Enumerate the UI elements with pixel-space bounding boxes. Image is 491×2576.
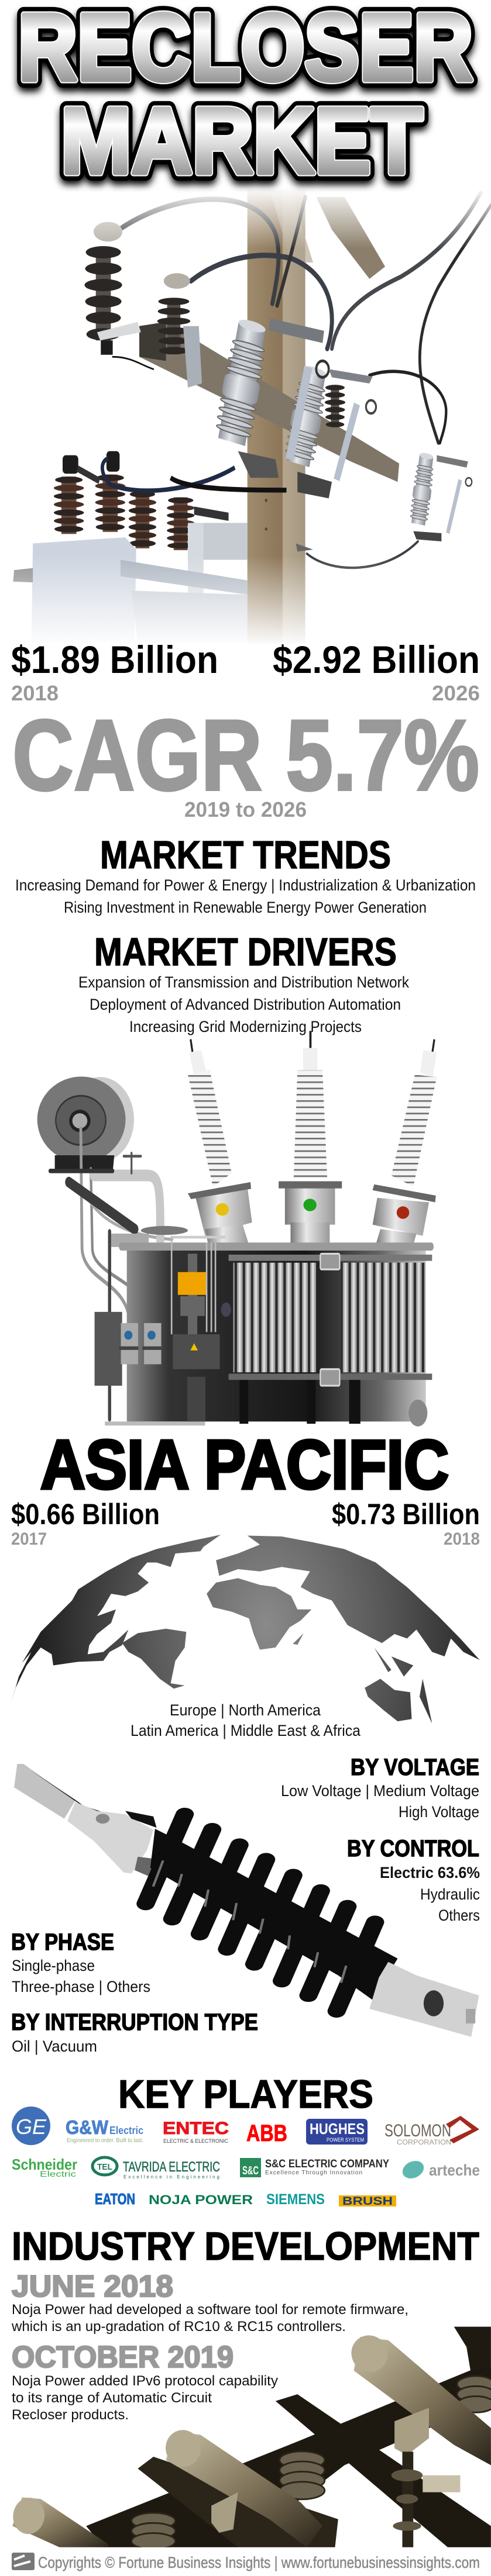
control panel	[171, 1236, 231, 1369]
heading: MARKET TRENDS	[100, 833, 391, 877]
segment by interruption type: Oil | Vacuum	[12, 2038, 97, 2055]
october 2019 item: to its range of Automatic Circuit	[12, 2390, 212, 2406]
logo: GE	[12, 2107, 50, 2145]
conservator tank	[37, 1076, 134, 1172]
world map globe	[11, 1535, 480, 1724]
segment by phase: BY PHASE	[11, 1929, 114, 1955]
trend items: Rising Investment in Renewable Energy Power Generation	[64, 899, 427, 916]
segment by control: Hydraulic	[420, 1886, 480, 1903]
driver items: Expansion of Transmission and Distribution Network	[78, 973, 409, 991]
asia pacific 2018 value	[332, 1498, 480, 1549]
logo: Schneider: Schneider	[12, 2156, 77, 2173]
logo: S&C: S&C	[242, 2164, 259, 2177]
asia pacific 2017 value: 2017	[11, 1529, 47, 1549]
june 2018 item: JUNE 2018	[12, 2270, 173, 2304]
market trends	[15, 833, 476, 916]
segment by voltage: High Voltage	[399, 1803, 479, 1821]
market size 2018: $1.89 Billion	[11, 638, 218, 681]
logo: Tavrida: TEL	[97, 2162, 112, 2172]
industry development	[11, 2224, 479, 2423]
june 2018 item	[11, 2270, 408, 2335]
title	[18, 0, 473, 198]
logo: Solomon: SOLOMON	[384, 2121, 451, 2140]
transformer tank	[105, 1226, 434, 1427]
market size 2018: 2018	[11, 681, 59, 705]
logo: S&C: S&C ELECTRIC COMPANY	[265, 2158, 389, 2170]
segment by voltage: Low Voltage | Medium Voltage	[281, 1782, 479, 1800]
CAGR: 2019 to 2026	[184, 797, 307, 821]
logo: Hughes	[306, 2119, 368, 2145]
logo: G&W Electric	[66, 2116, 143, 2144]
market size 2026: 2026	[432, 681, 480, 705]
segment by control: Others	[438, 1907, 480, 1924]
segment by interruption type	[11, 2009, 258, 2055]
logo: Siemens: SIEMENS	[266, 2191, 325, 2208]
asia pacific heading: ASIA PACIFIC	[40, 1426, 449, 1504]
segment by voltage	[281, 1755, 479, 1821]
segment by control	[347, 1836, 480, 1924]
transformer illustration	[37, 1031, 437, 1427]
logo: GE: GE	[16, 2115, 47, 2139]
logo: Tavrida: TAVRIDA ELECTRIC	[123, 2159, 220, 2175]
logo: ENTEC: ENTEC	[163, 2119, 229, 2138]
segment by phase	[11, 1929, 150, 1995]
logo: Solomon: CORPORATION	[397, 2138, 451, 2146]
october 2019 item: OCTOBER 2019	[12, 2340, 234, 2374]
market size 2018	[11, 638, 218, 705]
insulator image	[14, 1764, 479, 2037]
heading: KEY PLAYERS	[118, 2072, 373, 2116]
logo: S&C: Excellence Through Innovation	[265, 2170, 362, 2176]
logo: Brush: BRUSH	[342, 2195, 393, 2208]
logo: arteche	[400, 2157, 480, 2182]
segment by phase: Single-phase	[12, 1957, 95, 1974]
pipes	[50, 1128, 172, 1420]
side cabinet	[95, 1312, 162, 1386]
asia pacific 2018 value: 2018	[444, 1529, 480, 1549]
segment by control: Electric 63.6%	[380, 1864, 480, 1881]
footer	[12, 2553, 480, 2571]
driver items: Increasing Grid Modernizing Projects	[129, 1018, 362, 1035]
june 2018 item: which is an up-gradation of RC10 & RC15 controllers.	[11, 2319, 346, 2335]
logo: Hughes: HUGHES	[310, 2120, 365, 2138]
other regions	[131, 1701, 361, 1739]
title line 2: MARKET	[61, 88, 423, 193]
logo: Brush	[339, 2195, 396, 2208]
logo: G&W Electric: Electric	[109, 2125, 143, 2136]
june 2018 item: Noja Power had developed a software tool for remote firmware,	[12, 2302, 408, 2318]
logo: Tavrida: Excellence in Engineering	[123, 2174, 219, 2180]
bushings	[188, 1031, 437, 1245]
logo: Schneider: Electric	[40, 2169, 76, 2178]
logo: arteche: arteche	[429, 2161, 480, 2179]
logo: ENTEC	[163, 2119, 229, 2144]
title line 2: MARKET	[61, 88, 423, 193]
heading: MARKET DRIVERS	[94, 930, 397, 974]
segment by phase: Three-phase | Others	[12, 1978, 150, 1995]
title line 2: MARKET	[61, 88, 423, 193]
hero image: recloser on pole	[0, 187, 491, 647]
logo: Eaton: EATON	[95, 2190, 135, 2208]
logo: Tavrida	[92, 2157, 220, 2180]
asia pacific 2017 value	[11, 1498, 160, 1549]
october 2019 item: Noja Power added IPv6 protocol capability	[12, 2373, 278, 2389]
trend items	[15, 876, 476, 916]
logo: ABB: ABB	[246, 2121, 287, 2146]
status dots	[216, 1199, 409, 1219]
bottom sepia insulator photo	[0, 2327, 491, 2571]
icon: Fortune Business Insights logo	[12, 2553, 35, 2570]
logo: G&W Electric: Engineered to order. Built to last.	[67, 2138, 143, 2144]
driver items: Deployment of Advanced Distribution Automation	[90, 996, 401, 1013]
logo: G&W Electric: G&W	[66, 2116, 109, 2138]
other regions: Latin America | Middle East & Africa	[131, 1722, 361, 1739]
segment by interruption type: BY INTERRUPTION TYPE	[11, 2009, 258, 2035]
logo: S&C	[240, 2158, 389, 2177]
logo: Noja Power: NOJA POWER	[149, 2192, 253, 2207]
asia pacific 2017 value: $0.66 Billion	[11, 1498, 160, 1531]
other regions: Europe | North America	[170, 1701, 321, 1719]
driver items	[78, 973, 409, 1035]
market drivers	[78, 930, 409, 1035]
title shadow	[18, 0, 473, 198]
october 2019 item	[12, 2340, 278, 2423]
market size 2026	[273, 638, 480, 705]
logo: Solomon	[384, 2116, 479, 2146]
logo: Hughes: POWER SYSTEM	[327, 2137, 364, 2143]
key players	[12, 2072, 480, 2208]
title shadow: MARKET	[61, 93, 423, 198]
radiators	[229, 1254, 432, 1386]
logo: ENTEC: ELECTRIC & ELECTRONIC	[163, 2138, 228, 2144]
october 2019 item: Recloser products.	[12, 2407, 129, 2423]
